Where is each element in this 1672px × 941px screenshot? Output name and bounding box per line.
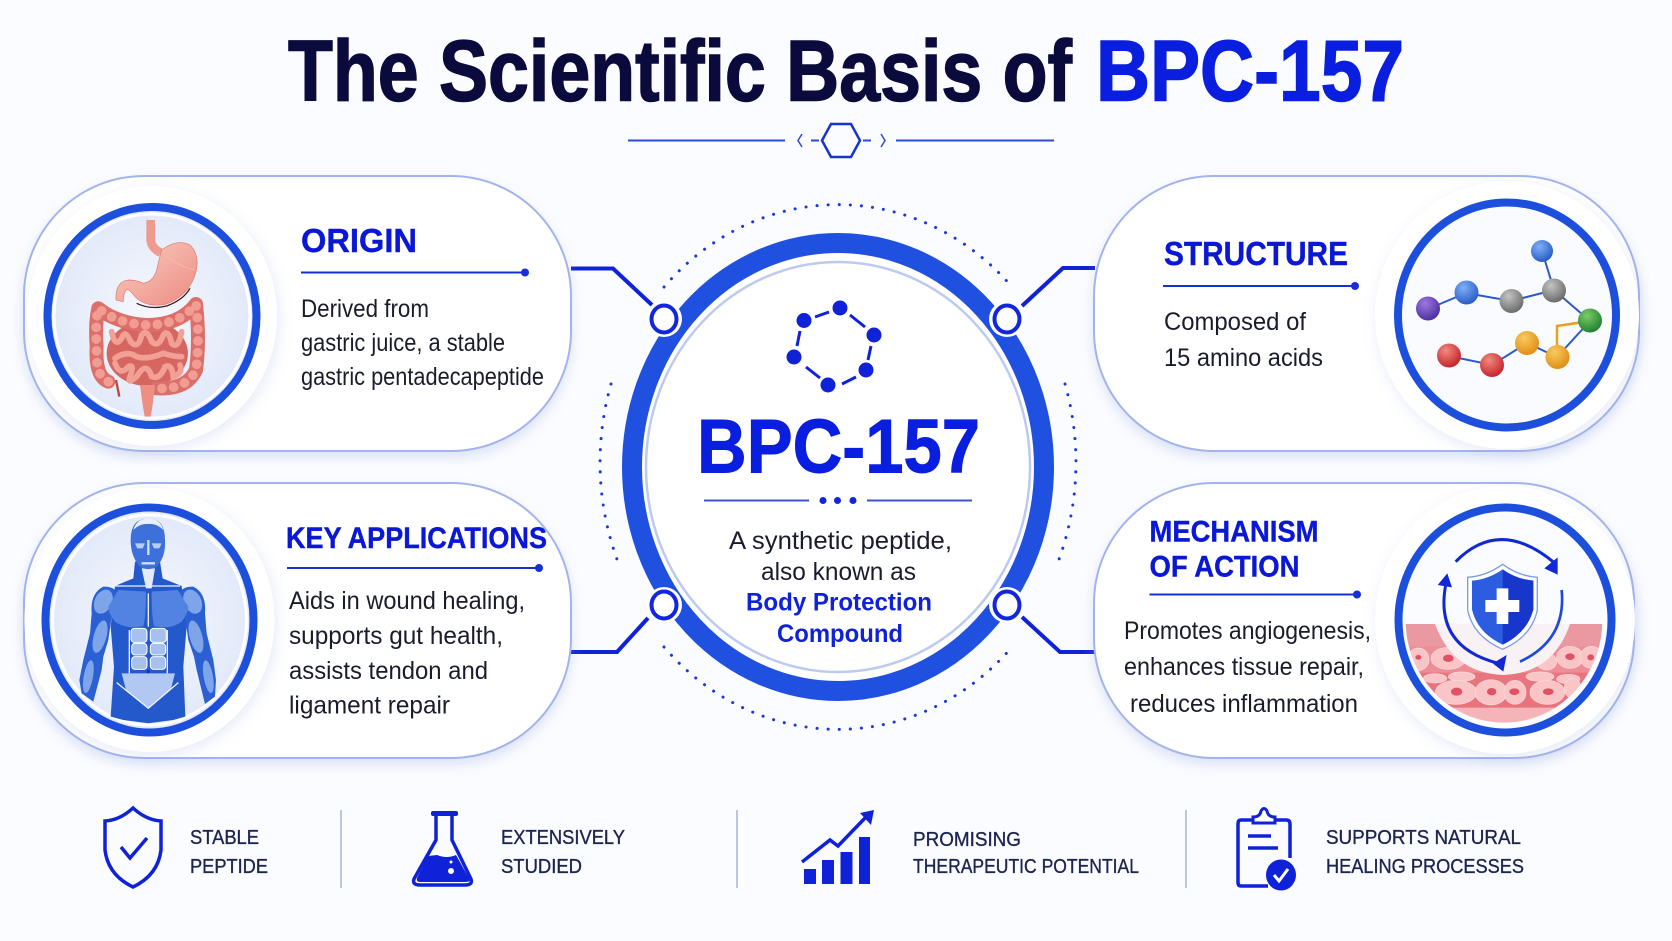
panel: key applications xyxy=(24,483,571,758)
label xyxy=(190,826,268,878)
label: SUPPORTS NATURAL xyxy=(1326,826,1521,849)
icon: amino acid chain molecule xyxy=(1375,181,1639,449)
central divider xyxy=(704,497,972,504)
label: THERAPEUTIC POTENTIAL xyxy=(913,855,1139,878)
ring nodes xyxy=(646,301,1025,623)
icon: growth chart xyxy=(802,810,874,884)
icon: peptide ring molecule xyxy=(786,300,882,392)
label xyxy=(501,826,625,878)
text: origin: Derived from xyxy=(301,295,429,323)
pecs xyxy=(108,590,146,627)
icon: flask xyxy=(414,811,471,885)
divider: mechanism xyxy=(1150,590,1361,598)
heading: origin: ORIGIN xyxy=(301,222,417,259)
heading: mechanism of action: MECHANISM xyxy=(1150,516,1318,548)
text: key applications: assists tendon and xyxy=(289,657,488,685)
label xyxy=(1326,826,1524,878)
central text: Compound xyxy=(777,620,903,648)
text: key applications: Aids in wound healing, xyxy=(289,587,525,615)
panel: mechanism of action xyxy=(1094,483,1635,758)
label: STABLE xyxy=(190,826,259,849)
text: mechanism: Promotes angiogenesis, xyxy=(1124,617,1371,645)
text: structure xyxy=(1164,308,1323,372)
panel: origin xyxy=(24,176,571,451)
central heading: BPC-157 xyxy=(697,404,980,490)
icon: muscular body xyxy=(24,488,274,752)
text: origin: gastric juice, a stable xyxy=(301,329,505,357)
text: origin: gastric pentadecapeptide xyxy=(301,363,544,391)
label: PROMISING xyxy=(913,828,1021,851)
arm highlights xyxy=(81,587,216,694)
text: origin xyxy=(301,295,544,391)
footer: supports natural healing processes xyxy=(1238,808,1524,890)
label: HEALING PROCESSES xyxy=(1326,855,1524,878)
label: PEPTIDE xyxy=(190,855,268,878)
divider: structure xyxy=(1163,282,1359,290)
central text: also known as xyxy=(761,558,916,586)
divider: key applications xyxy=(287,564,543,572)
text: key applications: supports gut health, xyxy=(289,622,503,650)
label: EXTENSIVELY xyxy=(501,826,625,849)
text: mechanism xyxy=(1124,617,1371,718)
icon: clipboard check xyxy=(1238,808,1296,890)
heading: mechanism of action xyxy=(1150,516,1318,584)
text: structure: 15 amino acids xyxy=(1164,344,1323,372)
icon: shield over tissue xyxy=(1375,486,1635,754)
panel: structure xyxy=(1094,176,1639,451)
head xyxy=(131,518,165,569)
footer: promising therapeutic potential xyxy=(802,810,1139,884)
dotted orbit xyxy=(600,205,1076,729)
heading: mechanism of action: OF ACTION xyxy=(1150,550,1300,584)
connector lines xyxy=(571,268,1095,652)
neck xyxy=(142,568,155,588)
label: STUDIED xyxy=(501,855,582,878)
divider: origin xyxy=(301,268,529,276)
left arm xyxy=(79,587,118,702)
panel: central BPC-157 circle xyxy=(600,205,1076,729)
heading: structure: STRUCTURE xyxy=(1164,235,1348,272)
text: mechanism: enhances tissue repair, xyxy=(1124,653,1364,681)
text: mechanism: reduces inflammation xyxy=(1130,690,1358,718)
title: BPC-157 xyxy=(1096,24,1404,120)
torso xyxy=(111,562,187,723)
footer: stable peptide xyxy=(105,808,268,887)
text: key applications: ligament repair xyxy=(289,692,450,720)
icon: stomach and intestines xyxy=(27,186,277,446)
central text xyxy=(729,527,952,648)
title divider with hexagon xyxy=(628,124,1054,157)
icon: shield check xyxy=(105,808,161,887)
right arm xyxy=(178,587,216,704)
title: The Scientific Basis of xyxy=(288,24,1072,120)
thick ring xyxy=(632,243,1044,691)
central text: A synthetic peptide, xyxy=(729,527,952,555)
central text: Body Protection xyxy=(746,588,932,616)
abs xyxy=(131,628,166,669)
heading: key applications: KEY APPLICATIONS xyxy=(286,522,547,555)
text: key applications xyxy=(289,587,525,720)
text: structure: Composed of xyxy=(1164,308,1306,336)
label xyxy=(913,828,1139,878)
footer: extensively studied xyxy=(414,811,625,885)
inner ring xyxy=(646,262,1030,672)
